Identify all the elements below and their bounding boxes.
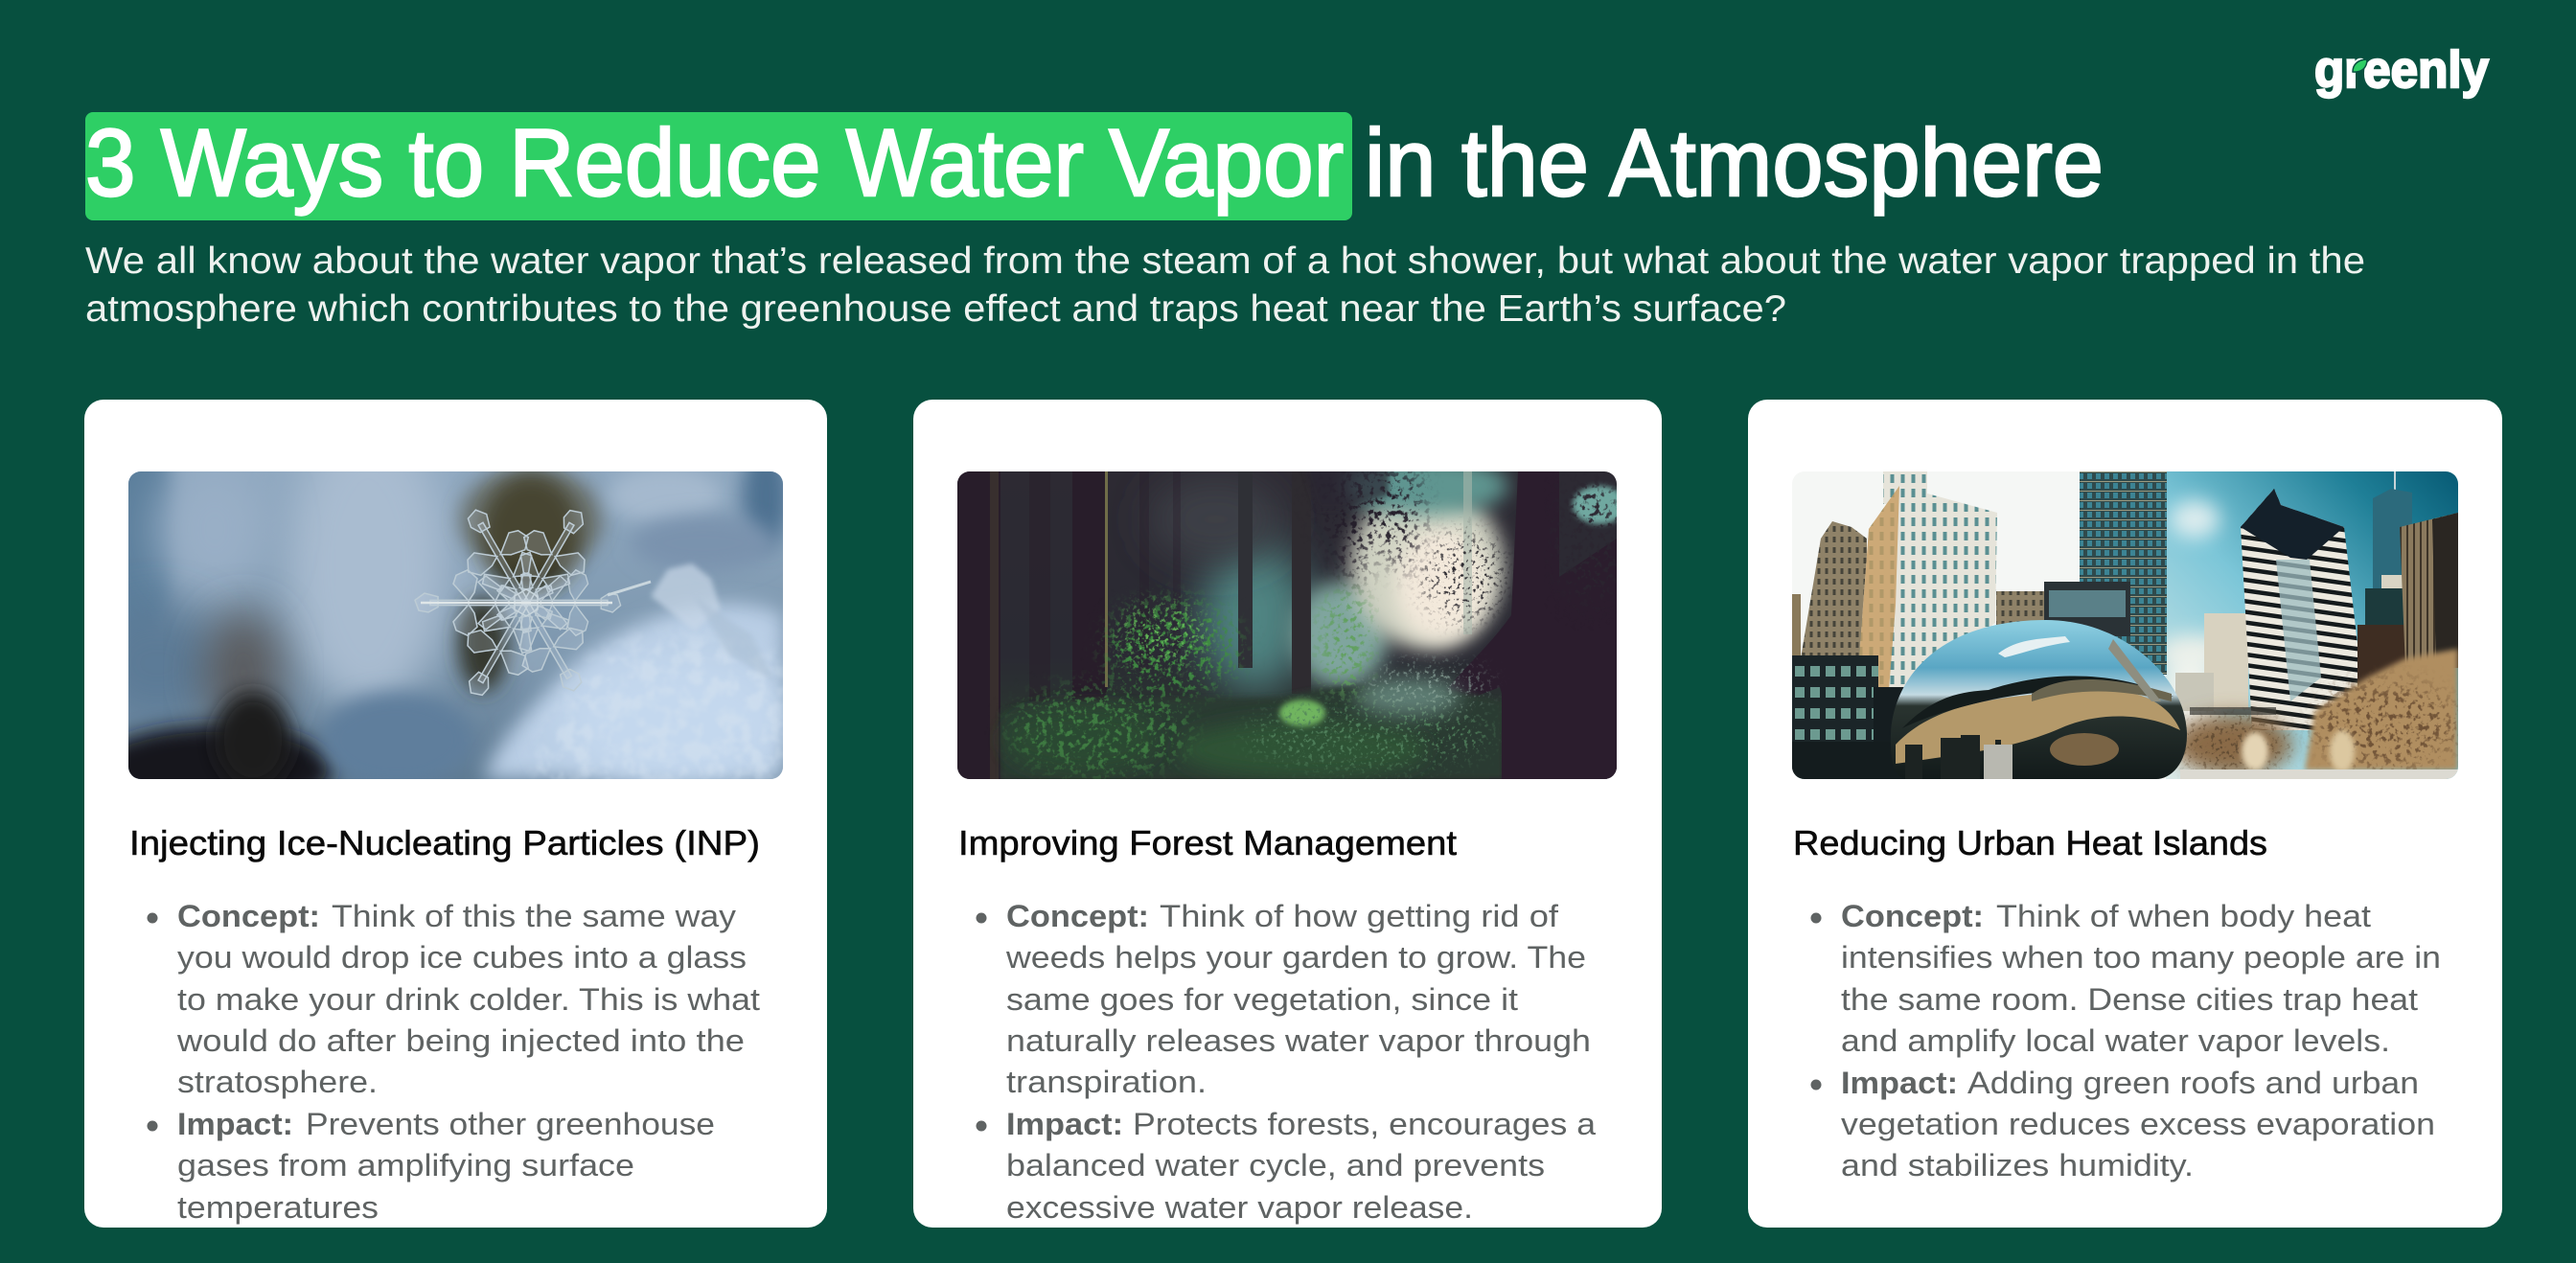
bullet: concept: Think of how getting rid of <box>1160 899 1559 933</box>
snowflake <box>414 509 652 696</box>
bullet: impact: Impact: <box>1006 1107 1123 1141</box>
right towers <box>2394 471 2396 491</box>
striped tower <box>2241 489 2361 730</box>
bullet: impact: Adding green roofs and urban <box>1967 1066 2419 1100</box>
bullet: concept: and amplify local water vapor levels. <box>1841 1023 2390 1058</box>
bullet: impact: gases from amplifying surface <box>177 1148 634 1183</box>
title <box>85 109 2104 220</box>
heading: Reducing Urban Heat Islands <box>1793 823 2267 862</box>
trunks <box>957 471 1311 779</box>
bullet: concept: Concept: <box>1006 899 1149 933</box>
image: city and reflective sculpture <box>1792 471 2458 779</box>
bullet: impact: excessive water vapor release. <box>1006 1190 1473 1225</box>
bullet: concept: Think of when body heat <box>1996 899 2371 933</box>
bullet: concept: same goes for vegetation, since it <box>1006 982 1518 1017</box>
heading: Improving Forest Management <box>958 823 1457 862</box>
logo: greenly: greenly <box>2314 41 2489 99</box>
right dark tree <box>1449 471 1617 779</box>
heading: Injecting Ice-Nucleating Particles (INP) <box>129 823 760 862</box>
bullet: impact: temperatures <box>177 1190 379 1225</box>
subtitle: atmosphere which contributes to the greenhouse effect and traps heat near the Earth’s surface? <box>85 288 1786 330</box>
bullet: concept: Concept: <box>177 899 320 933</box>
snow mass <box>531 635 783 779</box>
bullet: impact: Prevents other greenhouse <box>306 1107 715 1141</box>
bullet: concept: stratosphere. <box>177 1065 378 1099</box>
panel: forest management <box>913 400 1662 1228</box>
bullet: impact <box>148 1107 715 1225</box>
sculpture <box>1891 620 2187 779</box>
bullet: concept: would do after being injected into the <box>176 1023 745 1058</box>
bullet: impact: vegetation reduces excess evaporation <box>1841 1107 2435 1141</box>
bullet: impact: Impact: <box>177 1107 293 1141</box>
undergrowth foliage <box>1010 687 1192 773</box>
image: forest <box>957 457 1626 779</box>
bullet: concept: intensifies when too many people are in <box>1841 940 2441 975</box>
hanging branch <box>1312 471 1422 591</box>
panel: urban heat islands <box>1748 400 2502 1228</box>
buildings <box>1883 471 1927 504</box>
bullet: impact <box>1811 1066 2435 1183</box>
subtitle <box>85 241 2365 330</box>
bullet: concept: the same room. Dense cities trap heat <box>1841 982 2418 1017</box>
bullet: impact <box>976 1107 1597 1225</box>
left dark building <box>1792 655 1878 779</box>
bullet: concept <box>1811 899 2441 1058</box>
bullet: concept <box>976 899 1591 1099</box>
bullet: concept <box>148 899 760 1099</box>
ground and foliage <box>1000 685 1504 779</box>
bullet: concept: you would drop ice cubes into a glass <box>177 940 747 975</box>
image: snowflake <box>128 471 783 779</box>
bullet: impact: and stabilizes humidity. <box>1841 1148 2194 1183</box>
title highlighted text: 3 Ways to Reduce Water Vapor <box>85 109 1344 216</box>
bullet: impact: Impact: <box>1841 1066 1958 1100</box>
bullet: concept: weeds helps your garden to grow. The <box>1005 940 1586 975</box>
trees <box>2174 714 2292 775</box>
bullet: impact: Protects forests, encourages a <box>1133 1107 1597 1141</box>
bullet: concept: Concept: <box>1841 899 1984 933</box>
bullet: concept: Think of this the same way <box>332 899 737 933</box>
title highlight bar <box>85 112 1352 220</box>
bullet: concept: naturally releases water vapor through <box>1006 1023 1591 1058</box>
title remaining text: in the Atmosphere <box>1365 109 2104 216</box>
bullet: concept: transpiration. <box>1006 1065 1207 1099</box>
bullet: concept: to make your drink colder. This is what <box>177 982 760 1017</box>
bullet: impact: balanced water cycle, and prevents <box>1006 1148 1545 1183</box>
subtitle: We all know about the water vapor that’s released from the steam of a hot shower, but what about the water vapor trapped in the <box>85 241 2365 282</box>
panel: ice-nucleating particles <box>84 400 827 1228</box>
leaves right of mist <box>1422 534 1508 620</box>
